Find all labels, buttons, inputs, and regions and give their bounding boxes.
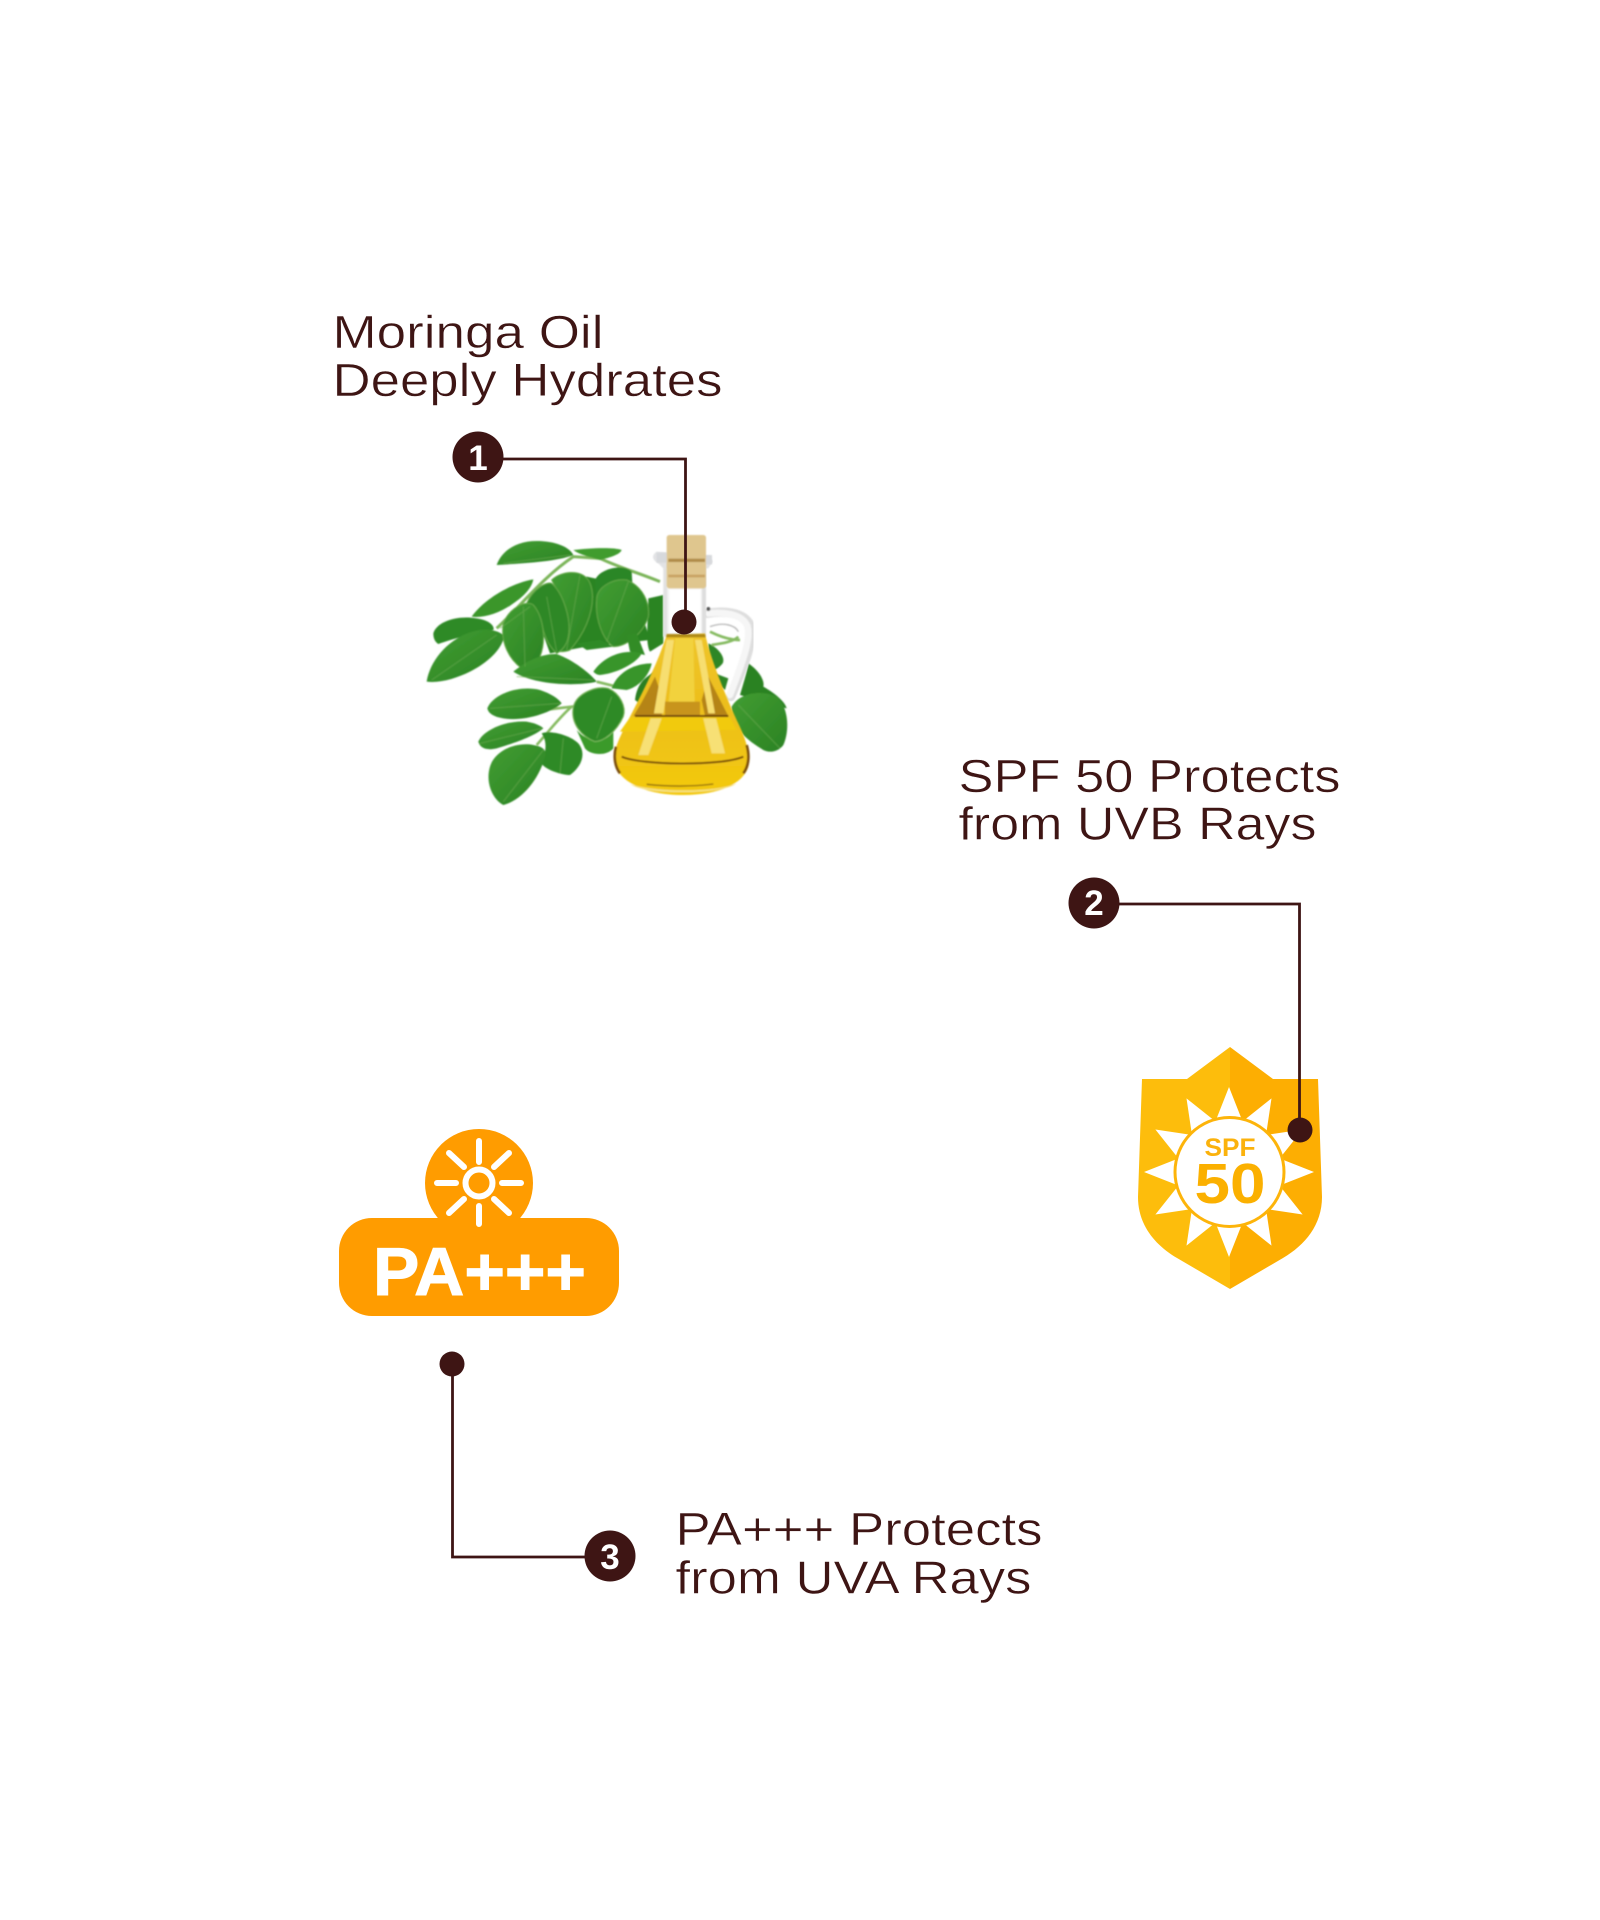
cork: [657, 535, 712, 588]
icon: spf 50 shield: [1138, 1047, 1322, 1289]
icon: pa+++ badge: [339, 1129, 619, 1316]
callout 2: numbered connector to shield: 2: [1084, 884, 1104, 923]
callout 1: numbered connector to bottle: 1: [468, 439, 488, 478]
oil bottle: [614, 535, 751, 795]
oil liquid: [614, 633, 749, 795]
text: pa+++ label: PA+++ Protects: [676, 1503, 1042, 1555]
text: moringa oil label: [332, 306, 722, 406]
callout 1: numbered connector to bottle: [452, 432, 696, 634]
callout 2: numbered connector to shield: [1068, 878, 1312, 1142]
icon: spf 50 shield: 50: [1194, 1152, 1266, 1216]
text: spf 50 label: [958, 750, 1340, 850]
text: pa+++ label: [676, 1503, 1042, 1604]
bottle neck: [653, 552, 713, 637]
callout 3: numbered connector from badge: 3: [600, 1538, 620, 1577]
illustration: moringa leaves and oil bottle: [427, 535, 787, 805]
callout 3: numbered connector from badge: [440, 1352, 636, 1582]
moringa leaves: [427, 541, 787, 805]
icon: spf 50 shield: SPF: [1204, 1134, 1256, 1162]
text: spf 50 label: SPF 50 Protects: [958, 750, 1340, 802]
text: moringa oil label: Deeply Hydrates: [332, 354, 722, 406]
bottle handle: [706, 607, 751, 697]
text: pa+++ label: from UVA Rays: [676, 1552, 1032, 1604]
text: moringa oil label: Moringa Oil: [332, 306, 604, 358]
icon: pa+++ badge: PA+++: [373, 1234, 586, 1310]
text: spf 50 label: from UVB Rays: [958, 798, 1316, 850]
